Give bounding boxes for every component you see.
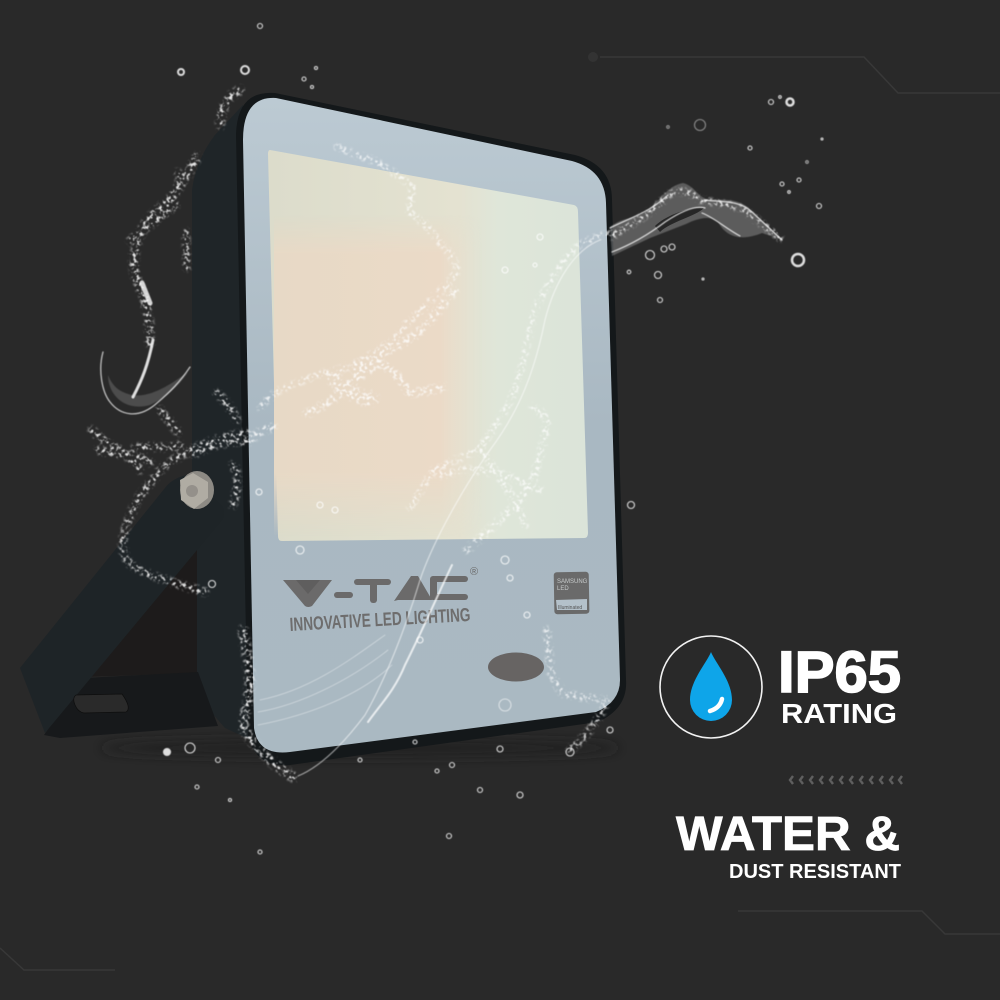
water and dust heading xyxy=(676,808,901,883)
housing side xyxy=(192,105,262,745)
bracket base xyxy=(44,672,218,738)
streak: bright lower stream xyxy=(368,565,452,722)
translucent curl on the left xyxy=(108,372,188,407)
streak: right jet edges xyxy=(610,195,782,252)
front frame xyxy=(236,93,626,765)
hex bolt xyxy=(180,471,214,509)
spray: across lens right xyxy=(410,233,613,507)
Samsung LED badge: SAMSUNG xyxy=(557,579,588,585)
Samsung LED badge: LED xyxy=(557,586,569,592)
floor shadow xyxy=(100,740,620,756)
bracket opening shadow xyxy=(84,550,197,677)
solid water streaks xyxy=(101,195,782,776)
water splashes xyxy=(92,90,783,777)
streak: thin right stream xyxy=(298,240,600,776)
IP65 heading: IP65 xyxy=(778,640,901,705)
streak: upper left blobs xyxy=(142,283,150,303)
spray: mid left xyxy=(123,433,247,592)
icon: water drop in circle xyxy=(660,636,762,738)
bracket slot xyxy=(74,694,128,713)
Samsung LED badge xyxy=(554,572,589,614)
lens spray texture xyxy=(250,147,613,750)
IP65 rating badge xyxy=(660,636,901,738)
rating label: RATING xyxy=(781,698,897,729)
spray: lower left xyxy=(243,630,293,777)
dust resistant subheading: DUST RESISTANT xyxy=(729,860,901,883)
spray: upper left arc xyxy=(134,90,240,343)
Samsung LED badge: Illuminated xyxy=(558,605,582,611)
warm light area xyxy=(274,244,444,528)
LED lens xyxy=(268,150,588,541)
registered mark: ® xyxy=(470,566,478,578)
hole in the right jet xyxy=(655,208,704,232)
streak: left curl xyxy=(133,340,153,397)
V-TAC wordmark xyxy=(334,576,468,603)
tagline: INNOVATIVE LED LIGHTING xyxy=(289,605,471,636)
panel logo: V-TAC xyxy=(283,566,478,636)
streak: left loop xyxy=(101,352,190,414)
streak: translucent arcs xyxy=(258,635,392,725)
front panel xyxy=(243,98,620,753)
water droplets xyxy=(164,24,823,854)
outside spray texture xyxy=(92,90,780,777)
spray: across lens upper xyxy=(260,147,457,407)
floodlight product xyxy=(20,93,626,765)
spray: lower right xyxy=(547,630,607,750)
chevron divider xyxy=(790,776,902,784)
water heading: WATER & xyxy=(676,808,900,861)
spray: right jet xyxy=(612,191,780,238)
bracket arm xyxy=(20,474,224,733)
translucent jet body on the right xyxy=(610,183,783,256)
sensor xyxy=(488,652,544,682)
V mark xyxy=(283,580,332,607)
